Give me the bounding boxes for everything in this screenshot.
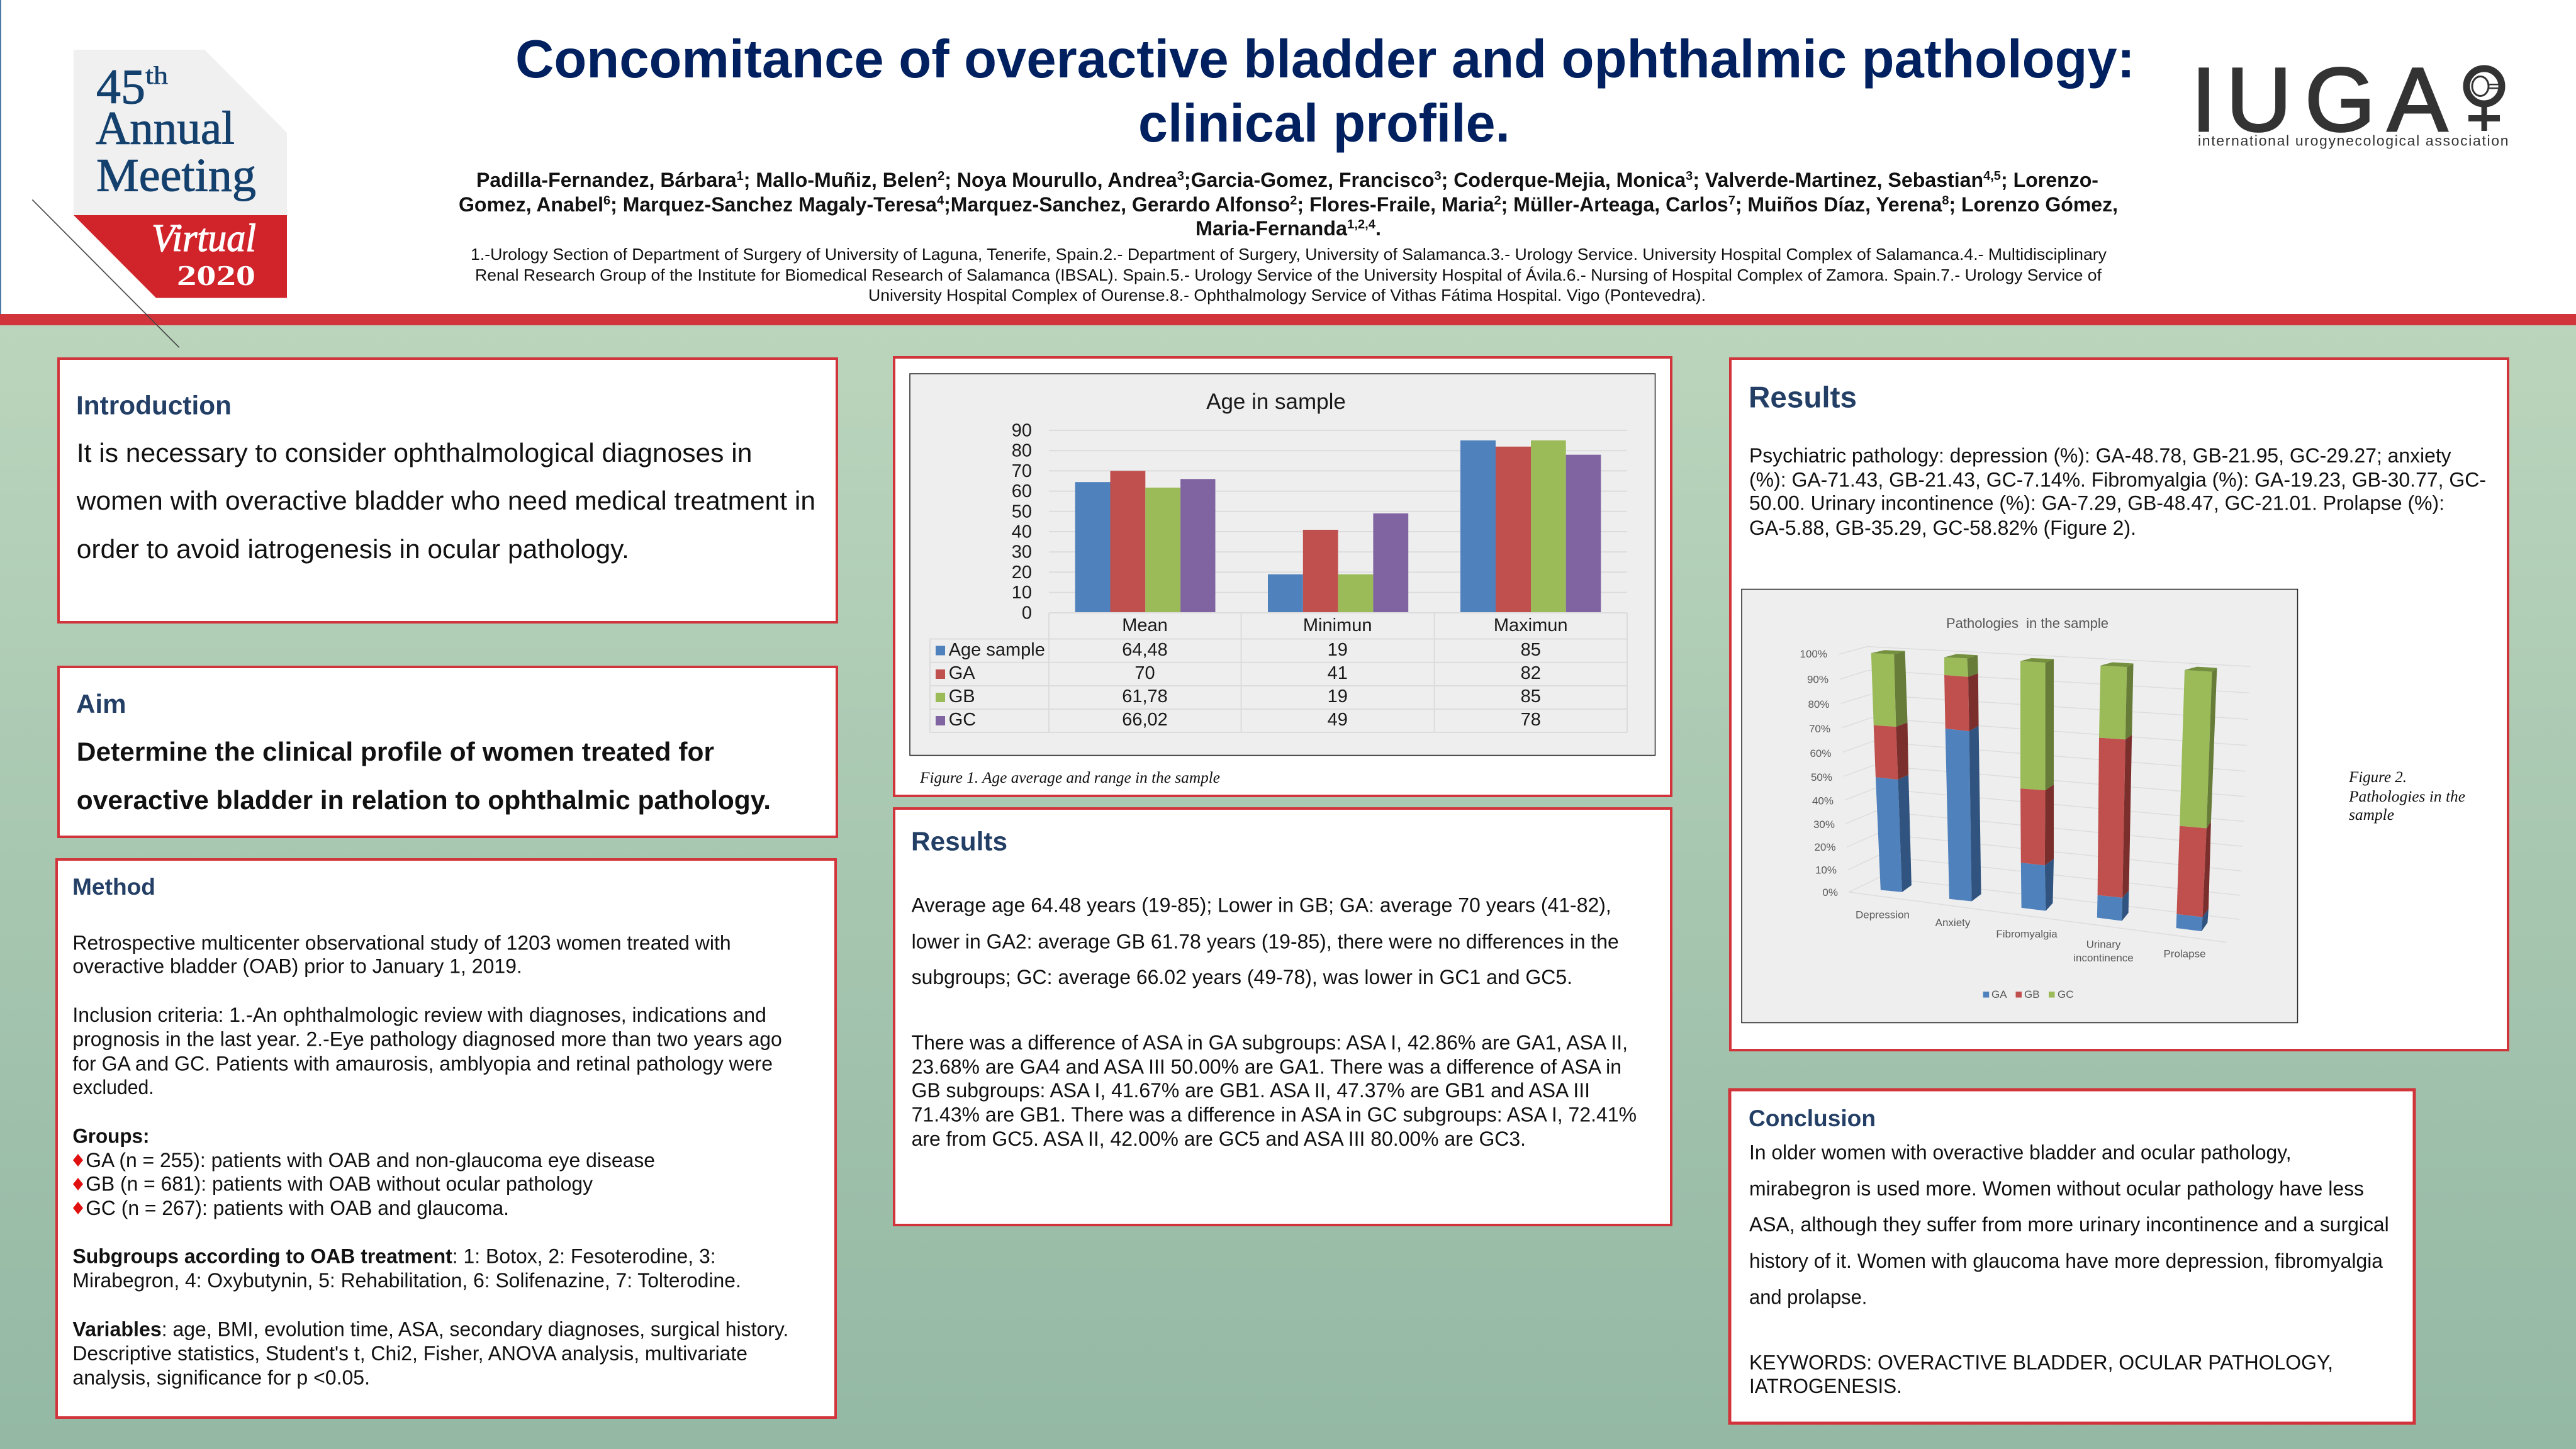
panel: results (age and ASA) <box>894 808 1671 1225</box>
text: variables <box>72 1318 788 1389</box>
IUGA logo: I <box>2191 49 2217 150</box>
category labels: Depression <box>1856 909 1910 921</box>
text: groups <box>72 1124 655 1219</box>
bar chart: age in sample: 20 <box>1012 562 1032 583</box>
bar chart: age in sample: 30 <box>1012 542 1032 562</box>
panel: aim <box>59 667 837 837</box>
stacked bar chart: pathologies in the sample <box>1742 589 2298 1023</box>
category labels: Prolapse <box>2163 948 2206 960</box>
affiliations: Renal Research Group of the Institute for Biomedical Research of Salamanca (IBSAL). Spain.5.- Urology Service of the University Hospital of Ávila.6.- Nursing of Hospital Complex of Zamora. Spain.7.- Urology Service of <box>475 266 2102 284</box>
stacked bar: anxiety <box>1944 654 1981 901</box>
affiliations: 1.-Urology Section of Department of Surgery of University of Laguna, Tenerife, Spain.2.- Department of Surgery, University of Salamanca.3.- Urology Service. University Hospital Complex of Salamanca.4.- Multidisciplinary <box>471 245 2107 264</box>
authors: 6 <box>603 194 610 208</box>
category labels: incontinence <box>2073 952 2134 964</box>
title <box>515 30 2135 154</box>
legend <box>1983 988 2074 1000</box>
authors: ; Mallo-Muñiz, Belen <box>744 169 938 191</box>
authors: ; Muiños Díaz, Yerena <box>1735 193 1942 216</box>
panel: conclusion <box>1730 1090 2414 1423</box>
y axis labels: 0% <box>1822 887 1838 898</box>
legend: GC <box>2058 988 2074 1000</box>
data table: 78 <box>1521 710 1541 730</box>
panel: figure 1 <box>894 357 1671 796</box>
heading: aim: Aim <box>76 689 126 719</box>
text: introduction body: women with overactive bladder who need medical treatment in <box>76 486 815 515</box>
text: keywords <box>1749 1351 2333 1397</box>
text: conclusion body: mirabegron is used more. Women without ocular pathology have less <box>1749 1177 2364 1200</box>
bar chart: age in sample <box>910 374 1655 755</box>
legend: GB <box>2024 988 2040 1000</box>
text: inclusion criteria <box>72 1004 782 1099</box>
text: pathology results: GA-5.88, GB-35.29, GC-58.82% (Figure 2). <box>1749 517 2136 539</box>
text: conclusion body: ASA, although they suffer from more urinary incontinence and a surgical <box>1749 1213 2389 1236</box>
authors: Padilla-Fernandez, Bárbara <box>476 169 736 191</box>
header band <box>0 314 2576 325</box>
category labels: Anxiety <box>1935 917 1971 929</box>
authors: 3 <box>1686 169 1693 183</box>
caption: figure 2: sample <box>2349 807 2394 824</box>
authors: 2 <box>1494 194 1501 208</box>
meeting logo: th <box>145 61 168 89</box>
y axis labels <box>1800 648 1838 898</box>
text: age results: Average age 64.48 years (19-85); Lower in GB; GA: average 70 years (41-82), <box>912 893 1611 916</box>
text: ASA results: GB subgroups: ASA I, 41.67% are GB1. ASA II, 47.37% are GB1 and ASA III <box>912 1079 1590 1102</box>
data table: Minimun <box>1303 615 1372 635</box>
data table: 19 <box>1328 686 1348 707</box>
authors: 8 <box>1942 194 1949 208</box>
authors: 7 <box>1728 194 1735 208</box>
bar chart: age in sample: Age in sample <box>1206 389 1346 414</box>
y axis labels: 60% <box>1810 747 1831 759</box>
authors: ; Lorenzo- <box>2001 169 2098 191</box>
caption: figure 2: Pathologies in the <box>2348 788 2465 805</box>
text: conclusion body <box>1749 1141 2389 1308</box>
text: subgroups: Mirabegron, 4: Oxybutynin, 5: Rehabilitation, 6: Solifenazine, 7: Tolterodine. <box>72 1269 741 1292</box>
text: ASA results: There was a difference of ASA in GA subgroups: ASA I, 42.86% are GA1, ASA II, <box>912 1031 1628 1054</box>
bar chart: age in sample: 10 <box>1012 583 1032 603</box>
authors <box>459 169 2118 240</box>
text: keywords: IATROGENESIS. <box>1749 1375 1902 1397</box>
text: study description: Retrospective multicenter observational study of 1203 women treated with <box>72 931 731 954</box>
affiliations: University Hospital Complex of Ourense.8.- Ophthalmology Service of Vithas Fátima Hospital. Vigo (Pontevedra). <box>868 286 1706 305</box>
text: keywords: KEYWORDS: OVERACTIVE BLADDER, OCULAR PATHOLOGY, <box>1749 1351 2333 1374</box>
y axis labels: 70% <box>1809 723 1830 735</box>
text: pathology results: Psychiatric pathology: depression (%): GA-48.78, GB-21.95, GC-29.27; anxiety <box>1749 444 2451 467</box>
bars: minimum <box>1268 513 1408 613</box>
authors: 1 <box>737 169 744 183</box>
heading: results: Results <box>1749 381 1857 414</box>
text: pathology results: 50.00. Urinary incontinence (%): GA-7.29, GB-48.47, GC-21.01. Prolapse (%): <box>1749 492 2444 515</box>
meeting logo: Meeting <box>96 150 256 201</box>
text: inclusion criteria: for GA and GC. Patients with amaurosis, amblyopia and retinal pathology were <box>72 1053 773 1075</box>
authors: ;Garcia-Gomez, Francisco <box>1184 169 1434 191</box>
y axis labels: 90% <box>1807 673 1828 686</box>
y axis labels: 10% <box>1815 864 1837 876</box>
heading: method: Method <box>72 874 155 900</box>
authors: 4 <box>937 194 944 208</box>
text: study description <box>72 931 731 978</box>
data table: Mean <box>1122 615 1168 635</box>
text: ASA results: 23.68% are GA4 and ASA III 50.00% are GA1. There was a difference of ASA in <box>912 1056 1621 1078</box>
text: ASA results <box>912 1031 1637 1150</box>
caption: figure 1: Figure 1. Age average and range in the sample <box>919 769 1220 786</box>
data table: 66,02 <box>1122 710 1168 730</box>
authors: ; Coderque-Mejia, Monica <box>1442 169 1686 191</box>
data table: GB <box>949 686 975 707</box>
bar chart: age in sample: 50 <box>1012 501 1032 522</box>
meeting logo: 45 <box>96 59 145 114</box>
panel: results (pathologies) <box>1730 359 2508 1050</box>
caption: figure 2 <box>2348 769 2465 824</box>
data table: 64,48 <box>1122 640 1168 660</box>
heading: conclusion: Conclusion <box>1749 1105 1876 1131</box>
text: groups: Groups: <box>72 1124 149 1147</box>
text: aim body: overactive bladder in relation to ophthalmic pathology. <box>77 785 771 815</box>
meeting logo <box>74 50 287 298</box>
text: subgroups: : 1: Botox, 2: Fesoterodine, 3: <box>452 1245 716 1267</box>
data table: 49 <box>1328 710 1348 730</box>
authors: 3 <box>1177 169 1184 183</box>
bar chart: age in sample: 60 <box>1012 481 1032 501</box>
meeting logo: Virtual <box>152 217 256 260</box>
data table: 85 <box>1521 686 1541 707</box>
authors: Maria-Fernanda <box>1196 217 1345 240</box>
authors: ;Marquez-Sanchez, Gerardo Alfonso <box>944 193 1290 216</box>
text: variables: analysis, significance for p <0.05. <box>72 1366 370 1389</box>
authors: 3 <box>1434 169 1442 183</box>
text: groups: GC (n = 267): patients with OAB and glaucoma. <box>86 1197 509 1219</box>
bars: mean <box>1075 471 1216 613</box>
panel: method <box>57 859 836 1418</box>
data table: Maximun <box>1494 615 1568 635</box>
text: pathology results <box>1749 444 2486 539</box>
authors: 4,5 <box>1983 169 2001 183</box>
diagonal line <box>32 199 179 347</box>
text: inclusion criteria: Inclusion criteria: 1.-An ophthalmologic review with diagnoses, indications and <box>72 1004 766 1026</box>
category labels: Fibromyalgia <box>1996 928 2058 940</box>
text: age results: subgroups; GC: average 66.02 years (49-78), was lower in GC1 and GC5. <box>912 966 1572 988</box>
text: groups: GB (n = 681): patients with OAB without ocular pathology <box>86 1173 593 1195</box>
text: subgroups <box>72 1245 741 1292</box>
y axis labels: 80% <box>1808 698 1830 710</box>
caption: figure 2: Figure 2. <box>2348 769 2407 786</box>
y axis labels: 40% <box>1812 795 1834 807</box>
text: introduction body: order to avoid iatrogenesis in ocular pathology. <box>77 534 629 564</box>
stacked bar: fibromyalgia <box>2020 658 2054 911</box>
bars: maximum <box>1460 440 1601 613</box>
authors: 2 <box>938 169 944 183</box>
authors: 1,2,4 <box>1347 218 1376 232</box>
data table: GC <box>949 710 976 730</box>
authors: Gomez, Anabel <box>459 193 603 216</box>
text: conclusion body: In older women with overactive bladder and ocular pathology, <box>1749 1141 2292 1164</box>
authors: ; Lorenzo Gómez, <box>1949 193 2118 216</box>
y axis labels: 30% <box>1813 819 1835 831</box>
data table <box>930 613 1627 732</box>
text: introduction body: It is necessary to consider ophthalmological diagnoses in <box>77 438 752 467</box>
text: variables: Descriptive statistics, Student's t, Chi2, Fisher, ANOVA analysis, multivariate <box>72 1342 748 1365</box>
y axis labels: 50% <box>1811 771 1832 783</box>
bar chart: age in sample: 90 <box>1012 420 1032 440</box>
meeting logo: Annual <box>96 102 235 155</box>
text: inclusion criteria: prognosis in the last year. 2.-Eye pathology diagnosed more than two years ago <box>72 1028 782 1051</box>
text: age results <box>912 893 1619 988</box>
title: clinical profile. <box>1138 94 1510 154</box>
authors: ; Flores-Fraile, Maria <box>1297 193 1494 216</box>
text: aim body <box>77 737 771 815</box>
title: Concomitance of overactive bladder and ophthalmic pathology: <box>515 30 2135 89</box>
text: age results: lower in GA2: average GB 61.78 years (19-85), there were no differences in the <box>912 931 1619 953</box>
data table: 19 <box>1328 640 1348 660</box>
IUGA logo: A <box>2387 49 2448 150</box>
category labels: Urinary <box>2086 939 2121 950</box>
y axis labels: 100% <box>1800 648 1827 660</box>
text: pathology results: (%): GA-71.43, GB-21.43, GC-7.14%. Fibromyalgia (%): GA-19.23, GB-30.77, GC- <box>1749 468 2486 491</box>
text: conclusion body: and prolapse. <box>1749 1285 1867 1308</box>
data table: 82 <box>1521 663 1541 683</box>
data table: 85 <box>1521 640 1541 660</box>
y axis labels: 20% <box>1814 841 1836 853</box>
authors: ; Noya Mourullo, Andrea <box>944 169 1177 191</box>
data table: 41 <box>1328 663 1348 683</box>
panel: introduction <box>59 359 837 622</box>
text: introduction body <box>76 438 815 564</box>
bar chart: age in sample: 0 <box>1022 603 1032 623</box>
authors: ; Valverde-Martinez, Sebastian <box>1693 169 1983 191</box>
text: subgroups: Subgroups according to OAB treatment <box>72 1245 452 1267</box>
text: ASA results: 71.43% are GB1. There was a difference in ASA in GC subgroups: ASA I, 72.41% <box>912 1104 1637 1126</box>
text: conclusion body: history of it. Women with glaucoma have more depression, fibromyalgia <box>1749 1250 2383 1272</box>
category labels <box>1856 909 2206 964</box>
data table: 61,78 <box>1122 686 1168 707</box>
authors: ; Marquez-Sanchez Magaly-Teresa <box>610 193 937 216</box>
text: ASA results: are from GC5. ASA II, 42.00% are GC5 and ASA III 80.00% are GC3. <box>912 1127 1526 1150</box>
legend: GA <box>1991 988 2007 1000</box>
text: groups: GA (n = 255): patients with OAB and non-glaucoma eye disease <box>86 1149 655 1172</box>
IUGA logo: G <box>2305 49 2375 150</box>
stacked bar: prolapse <box>2176 667 2217 931</box>
data table: 70 <box>1134 663 1155 683</box>
text: inclusion criteria: excluded. <box>72 1076 154 1099</box>
bar chart: age in sample: 40 <box>1012 522 1032 542</box>
authors: 2 <box>1290 194 1297 208</box>
stacked bar chart: pathologies in the sample: Pathologies in the sample <box>1946 615 2108 631</box>
authors: . <box>1375 217 1381 240</box>
text: aim body: Determine the clinical profile of women treated for <box>77 737 714 766</box>
IUGA logo: U <box>2226 49 2292 150</box>
text: variables: : age, BMI, evolution time, ASA, secondary diagnoses, surgical history. <box>162 1318 788 1340</box>
bar chart: age in sample: 80 <box>1012 441 1032 461</box>
data table: GA <box>949 663 975 683</box>
heading: results: Results <box>911 826 1007 856</box>
stacked bar: depression <box>1871 650 1912 892</box>
affiliations <box>471 245 2107 305</box>
heading: introduction: Introduction <box>76 390 232 420</box>
bar chart: age in sample: 70 <box>1012 461 1032 481</box>
meeting logo: 2020 <box>177 259 255 291</box>
authors: ; Müller-Arteaga, Carlos <box>1501 193 1728 216</box>
stacked bar: urinary incontinence <box>2097 663 2134 921</box>
text: variables: Variables <box>72 1318 162 1340</box>
IUGA logo <box>2191 49 2508 150</box>
text: study description: overactive bladder (OAB) prior to January 1, 2019. <box>72 955 522 978</box>
data table: Age sample <box>949 640 1045 660</box>
IUGA logo: international urogynecological association <box>2198 132 2508 148</box>
